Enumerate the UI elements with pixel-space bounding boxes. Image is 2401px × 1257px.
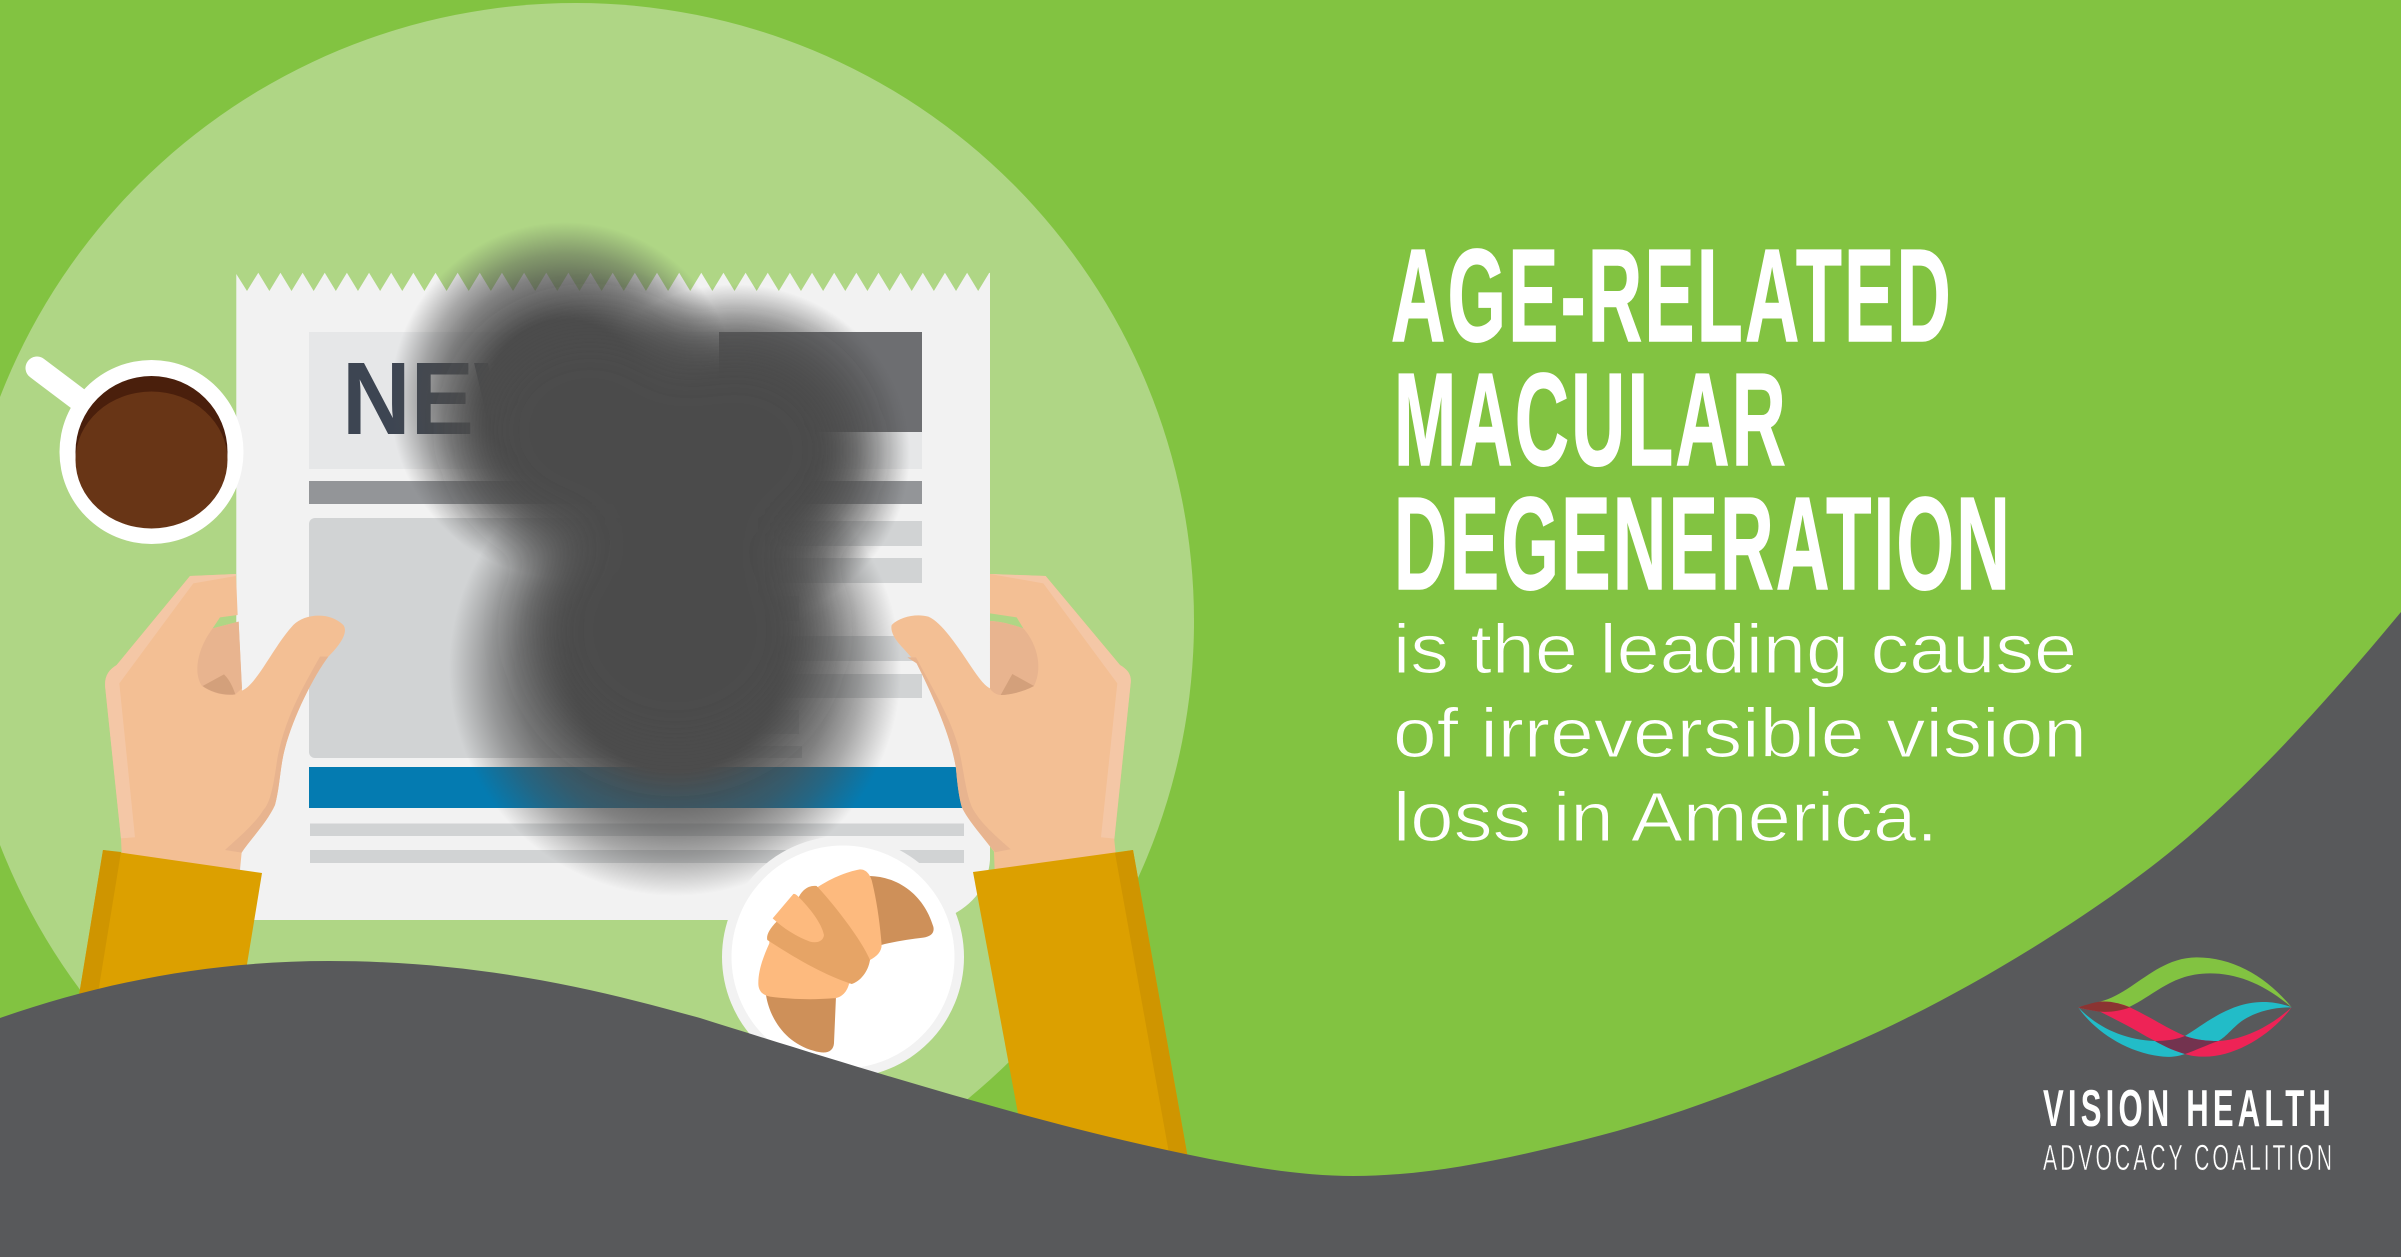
green band (2078, 957, 2292, 1010)
finger shade (203, 674, 235, 695)
body text: loss in America. (1393, 778, 1938, 856)
cuff shade (53, 850, 121, 1153)
headline (1391, 222, 2012, 617)
newspaper (236, 273, 990, 920)
right sleeve (973, 850, 1190, 1170)
centre overlap (2155, 1036, 2218, 1054)
hand shape (891, 574, 1131, 880)
coffee shadow (76, 376, 228, 528)
footer lines (310, 824, 964, 863)
thumb shadow (225, 657, 328, 853)
plate with croissant (722, 836, 964, 1078)
right hand (891, 574, 1131, 880)
body text: is the leading cause (1393, 610, 2077, 688)
article text lines (700, 521, 922, 758)
headline: MACULAR (1394, 346, 1788, 493)
blue banner (309, 767, 969, 808)
body text: of irreversible vision (1393, 694, 2087, 772)
pink band (2078, 1002, 2292, 1057)
teal band (2078, 1002, 2292, 1057)
masthead text: NEWS (342, 341, 627, 456)
grey headline bar (309, 481, 922, 504)
body text (1393, 610, 2087, 856)
croissant (758, 869, 934, 1053)
left overlap (2078, 1001, 2130, 1012)
plate rim (722, 836, 964, 1078)
finger shade (1001, 674, 1034, 695)
thumb shadow (907, 657, 1011, 852)
photo block (309, 518, 689, 758)
masthead image block (719, 332, 922, 432)
hand highlight (990, 574, 1131, 839)
dark grey wave foreground (0, 612, 2401, 1257)
plate centre (732, 846, 954, 1068)
light green circle (0, 3, 1194, 1239)
blurred vision scotoma (390, 222, 910, 896)
cuff shade (1115, 850, 1190, 1170)
cuff (53, 850, 262, 1153)
hand highlight (105, 574, 236, 838)
headline: AGE-RELATED (1391, 222, 1953, 369)
cup handle (37, 368, 90, 408)
cuff (973, 850, 1190, 1170)
masthead box (309, 332, 922, 469)
coffee surface (76, 392, 228, 528)
paper sheet (236, 273, 990, 920)
curled finger (197, 622, 242, 695)
logo mark (2078, 957, 2292, 1057)
hand shape (105, 574, 345, 870)
left hand (105, 574, 345, 870)
left sleeve (53, 850, 262, 1153)
cup body (60, 360, 244, 544)
logo wordmark (2043, 1080, 2335, 1178)
coffee cup (37, 360, 244, 544)
curled finger (990, 621, 1038, 695)
